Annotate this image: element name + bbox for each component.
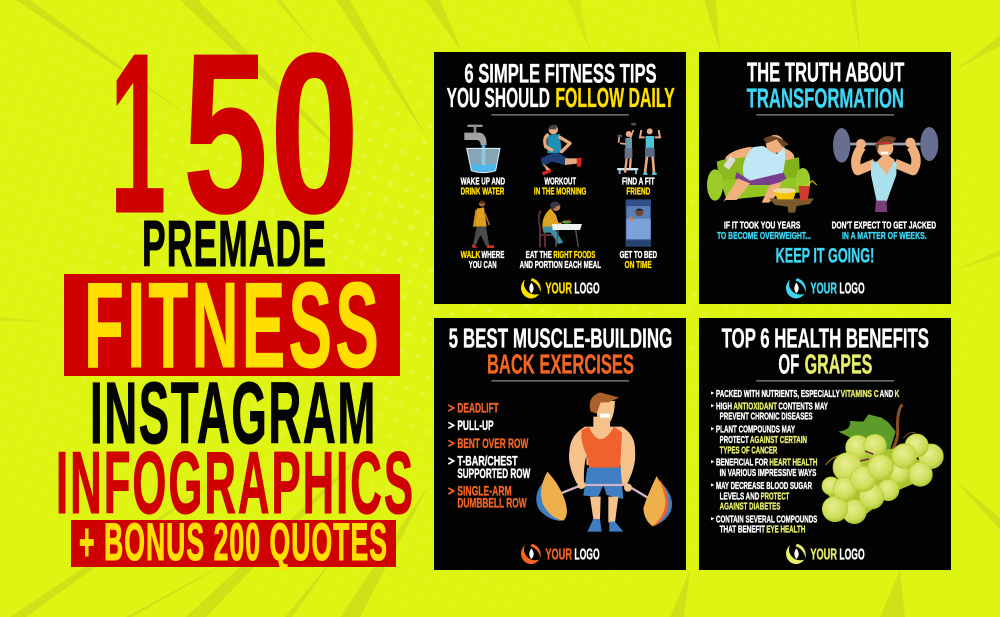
bonus banner: [71, 513, 396, 572]
title: grapes: [722, 322, 929, 379]
title: fitness tips: YOU SHOULD: [447, 82, 550, 113]
title: fitness tips: FOLLOW DAILY: [555, 82, 675, 113]
captions: DON'T EXPECT TO GET JACKED: [832, 221, 936, 232]
benefits list: HEART HEALTH: [769, 458, 817, 469]
benefits list: LEVELS AND: [720, 491, 760, 502]
logo: LOGO: [574, 546, 600, 563]
logo: LOGO: [839, 281, 865, 298]
tip labels: AND PORTION EACH MEAL: [520, 260, 601, 271]
tip labels: WHERE: [481, 250, 505, 261]
tip labels: DRINK WATER: [461, 187, 504, 198]
benefits list: MAY DECREASE BLOOD SUGAR: [716, 481, 812, 492]
logo: [786, 278, 865, 298]
headline: 150: 1: [110, 7, 166, 261]
panel: back exercises: [434, 318, 686, 570]
exercise list: [448, 401, 530, 511]
fitness banner: [64, 257, 400, 393]
benefits list: ANTIOXIDANT: [733, 402, 777, 413]
icon: faucet and glass: [464, 125, 500, 173]
text: INFOGRAPHICS: [56, 433, 415, 532]
tip labels: RIGHT FOODS: [553, 250, 596, 261]
icon: fit friends: [617, 123, 660, 175]
icon: walking man: [472, 201, 494, 248]
tip labels: YOU CAN: [469, 260, 497, 271]
benefits list: HIGH: [716, 402, 732, 413]
exercise list: PULL-UP: [457, 418, 494, 433]
benefits list: VITAMINS C: [841, 389, 879, 400]
tip labels: FRIEND: [626, 187, 650, 198]
captions: IN A MATTER OF WEEKS.: [842, 231, 927, 242]
illustration: man lifting barbell: [536, 392, 672, 532]
title: back exercises: 5 BEST MUSCLE-BUILDING: [449, 322, 672, 353]
tip labels: IN THE MORNING: [534, 187, 586, 198]
title: transformation: TRANSFORMATION: [747, 82, 904, 113]
logo: YOUR: [810, 281, 837, 298]
headline: 150: 0: [270, 7, 359, 261]
exercise list: T-BAR/CHEST: [457, 454, 518, 469]
tip labels: [461, 177, 657, 271]
benefits list: CONTENTS MAY: [778, 402, 828, 413]
benefits list: EYE HEALTH: [766, 525, 805, 536]
captions: TO BECOME OVERWEIGHT...: [717, 231, 811, 242]
title: fitness tips: [447, 58, 675, 113]
captions: [717, 221, 936, 242]
benefits list: AGAINST DIABETES: [720, 502, 780, 513]
title: back exercises: BACK EXERCISES: [487, 348, 634, 379]
captions: IF IT TOOK YOU YEARS: [724, 221, 801, 232]
tip labels: ON TIME: [625, 260, 652, 271]
icon: person eating at table: [539, 201, 582, 247]
illustration: man on couch: [707, 135, 817, 213]
illustration: man lifting barbell: [833, 127, 938, 212]
benefits list: PACKED WITH NUTRIENTS, ESPECIALLY: [716, 389, 840, 400]
exercise list: DUMBBELL ROW: [457, 496, 527, 511]
headline: premade: PREMADE: [142, 207, 327, 280]
tip labels: FIND A FIT: [622, 177, 655, 188]
benefits list: PROTECT: [761, 491, 790, 502]
exercise list: BENT OVER ROW: [457, 436, 528, 451]
title: back exercises: [449, 322, 672, 379]
tip labels: WORKOUT: [544, 177, 576, 188]
panel: 6 simple fitness tips: [434, 52, 686, 304]
tip labels: GET TO BED: [620, 250, 657, 261]
panel: truth about transformation: [699, 52, 951, 304]
benefits list: PLANT COMPOUNDS MAY: [716, 425, 795, 436]
benefits list: AND: [880, 389, 894, 400]
fitness banner: FITNESS: [84, 257, 382, 393]
title: transformation: THE TRUTH ABOUT: [747, 56, 905, 87]
benefits list: [711, 389, 900, 536]
exercise list: DEADLIFT: [457, 401, 499, 416]
logo: LOGO: [574, 281, 600, 298]
logo: YOUR: [810, 546, 837, 563]
illustration: grapes: [822, 404, 943, 524]
benefits list: K: [895, 389, 900, 400]
headline: 150: [110, 7, 359, 261]
logo: [521, 278, 600, 298]
headline: instagram: INSTAGRAM: [90, 365, 377, 462]
benefits list: AGAINST CERTAIN: [750, 435, 807, 446]
title: grapes: GRAPES: [805, 348, 872, 379]
benefits list: PREVENT CHRONIC DISEASES: [720, 412, 813, 423]
headline block: [56, 7, 415, 572]
benefits list: BENEFICIAL FOR: [716, 458, 768, 469]
icon: bed: [626, 199, 651, 247]
exercise list: SUPPORTED ROW: [457, 466, 530, 481]
benefits list: IN VARIOUS IMPRESSIVE WAYS: [720, 468, 816, 479]
title: grapes: OF: [778, 348, 799, 379]
title: fitness tips: 6 SIMPLE FITNESS TIPS: [464, 58, 657, 88]
logo: YOUR: [545, 546, 572, 563]
headline: 150: 5: [183, 7, 268, 261]
call to action: KEEP IT GOING!: [776, 243, 874, 268]
exercise list: SINGLE-ARM: [457, 484, 512, 499]
bonus banner: + BONUS 200 QUOTES: [79, 513, 388, 572]
logo: [521, 544, 600, 564]
logo: YOUR: [545, 281, 572, 298]
logo: [786, 544, 865, 564]
benefits list: CONTAIN SEVERAL COMPOUNDS: [716, 514, 817, 525]
benefits list: THAT BENEFIT: [720, 525, 765, 536]
logo: LOGO: [839, 546, 865, 563]
benefits list: PROTECT: [720, 435, 749, 446]
icon: lunge workout: [540, 125, 582, 175]
tip labels: EAT THE: [526, 250, 552, 261]
panel: health benefits of grapes: [699, 318, 951, 570]
tip labels: WAKE UP AND: [461, 177, 505, 188]
benefits list: TYPES OF CANCER: [720, 445, 778, 456]
title: transformation: [747, 56, 905, 113]
tip labels: WALK: [461, 250, 481, 261]
